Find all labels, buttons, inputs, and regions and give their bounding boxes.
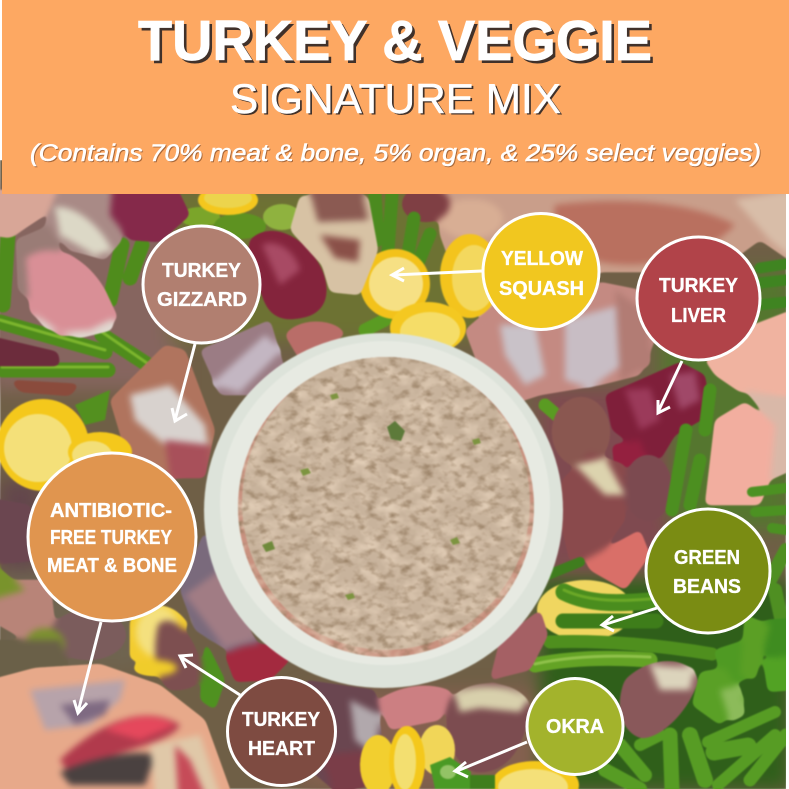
- subtitle: SIGNATURE MIX: [232, 76, 563, 124]
- label: antibiotic-free turkey meat and bone: [28, 453, 196, 621]
- composition note: (Contains 70% meat & bone, 5% organ, & 25% select veggies): [31, 141, 762, 168]
- photo: big turkey bone bottom left: [0, 664, 232, 789]
- food photo background: [0, 160, 789, 789]
- arrow: turkey gizzard: [172, 344, 195, 421]
- label: turkey liver: [637, 237, 760, 360]
- label: turkey gizzard: TURKEY: [162, 260, 242, 282]
- photo: turkey piece top right: [402, 186, 789, 320]
- photo: meat right of bowl: [465, 282, 655, 405]
- white strip at right edge: [786, 160, 789, 789]
- arrow: turkey liver: [658, 361, 682, 413]
- label: turkey heart: TURKEY: [242, 709, 321, 731]
- label: turkey liver: TURKEY: [659, 275, 739, 297]
- photo: squash and okra bottom centre: [360, 725, 579, 789]
- photo: squash slices top: [197, 194, 492, 348]
- arrow: green beans: [602, 608, 657, 631]
- label: green beans: GREEN: [674, 547, 740, 569]
- bowl: mixed food: [235, 350, 540, 660]
- subtitle: SIGNATURE MIX: [230, 75, 561, 122]
- label: okra: OKRA: [546, 716, 604, 738]
- arrow: turkey meat and bone: [74, 622, 101, 713]
- label: turkey gizzard: GIZZARD: [157, 289, 247, 311]
- label: turkey gizzard: [143, 226, 260, 343]
- photo: green beans lower right: [535, 562, 712, 665]
- label: turkey liver: LIVER: [671, 305, 727, 327]
- photo: okra lower right: [692, 615, 789, 725]
- photo: pink meat far right: [705, 310, 789, 505]
- label: green beans: [646, 509, 770, 633]
- label: turkey heart: HEART: [248, 738, 315, 760]
- bowl: [204, 333, 563, 688]
- photo: meat pieces top left: [0, 190, 190, 396]
- photo: gizzard meat under label: [110, 320, 345, 480]
- photo: hearts and squash beside bowl bottom left: [130, 530, 290, 710]
- photo: beans far right: [672, 264, 786, 640]
- photo: cream meat top centre: [290, 192, 378, 295]
- header band: [2, 0, 789, 194]
- label: yellow squash: [483, 214, 599, 330]
- photo: liver top centre: [249, 231, 326, 319]
- composition note: (Contains 70% meat & bone, 5% organ, & 25% select veggies): [30, 140, 761, 167]
- arrow: okra: [455, 742, 527, 777]
- photo: left side meat: [0, 498, 126, 680]
- title: TURKEY & VEGGIE: [141, 12, 655, 76]
- arrow: turkey heart: [180, 655, 240, 695]
- label: okra: [527, 678, 623, 774]
- photo: colour zones underlay: [0, 190, 789, 789]
- photo: squash slices left: [0, 390, 132, 491]
- arrow: yellow squash: [392, 268, 482, 281]
- photo: turkey liver right: [605, 362, 708, 468]
- label: antibiotic-free turkey meat and bone: FREE TURKEY: [50, 527, 173, 549]
- photo: hearts lower centre: [305, 610, 698, 789]
- label: turkey heart: [228, 678, 336, 786]
- label: yellow squash: SQUASH: [499, 278, 584, 300]
- label: antibiotic-free turkey meat and bone: MEAT & BONE: [47, 555, 177, 577]
- title: TURKEY & VEGGIE: [138, 9, 652, 73]
- photo: beans bottom right: [605, 712, 786, 789]
- label: yellow squash: YELLOW: [501, 248, 583, 270]
- photo: green beans top centre: [0, 195, 560, 418]
- photo: okra top: [180, 204, 301, 239]
- label: antibiotic-free turkey meat and bone: ANTIBIOTIC-: [50, 500, 172, 522]
- photo: hearts right: [552, 397, 672, 590]
- label: green beans: BEANS: [673, 576, 741, 598]
